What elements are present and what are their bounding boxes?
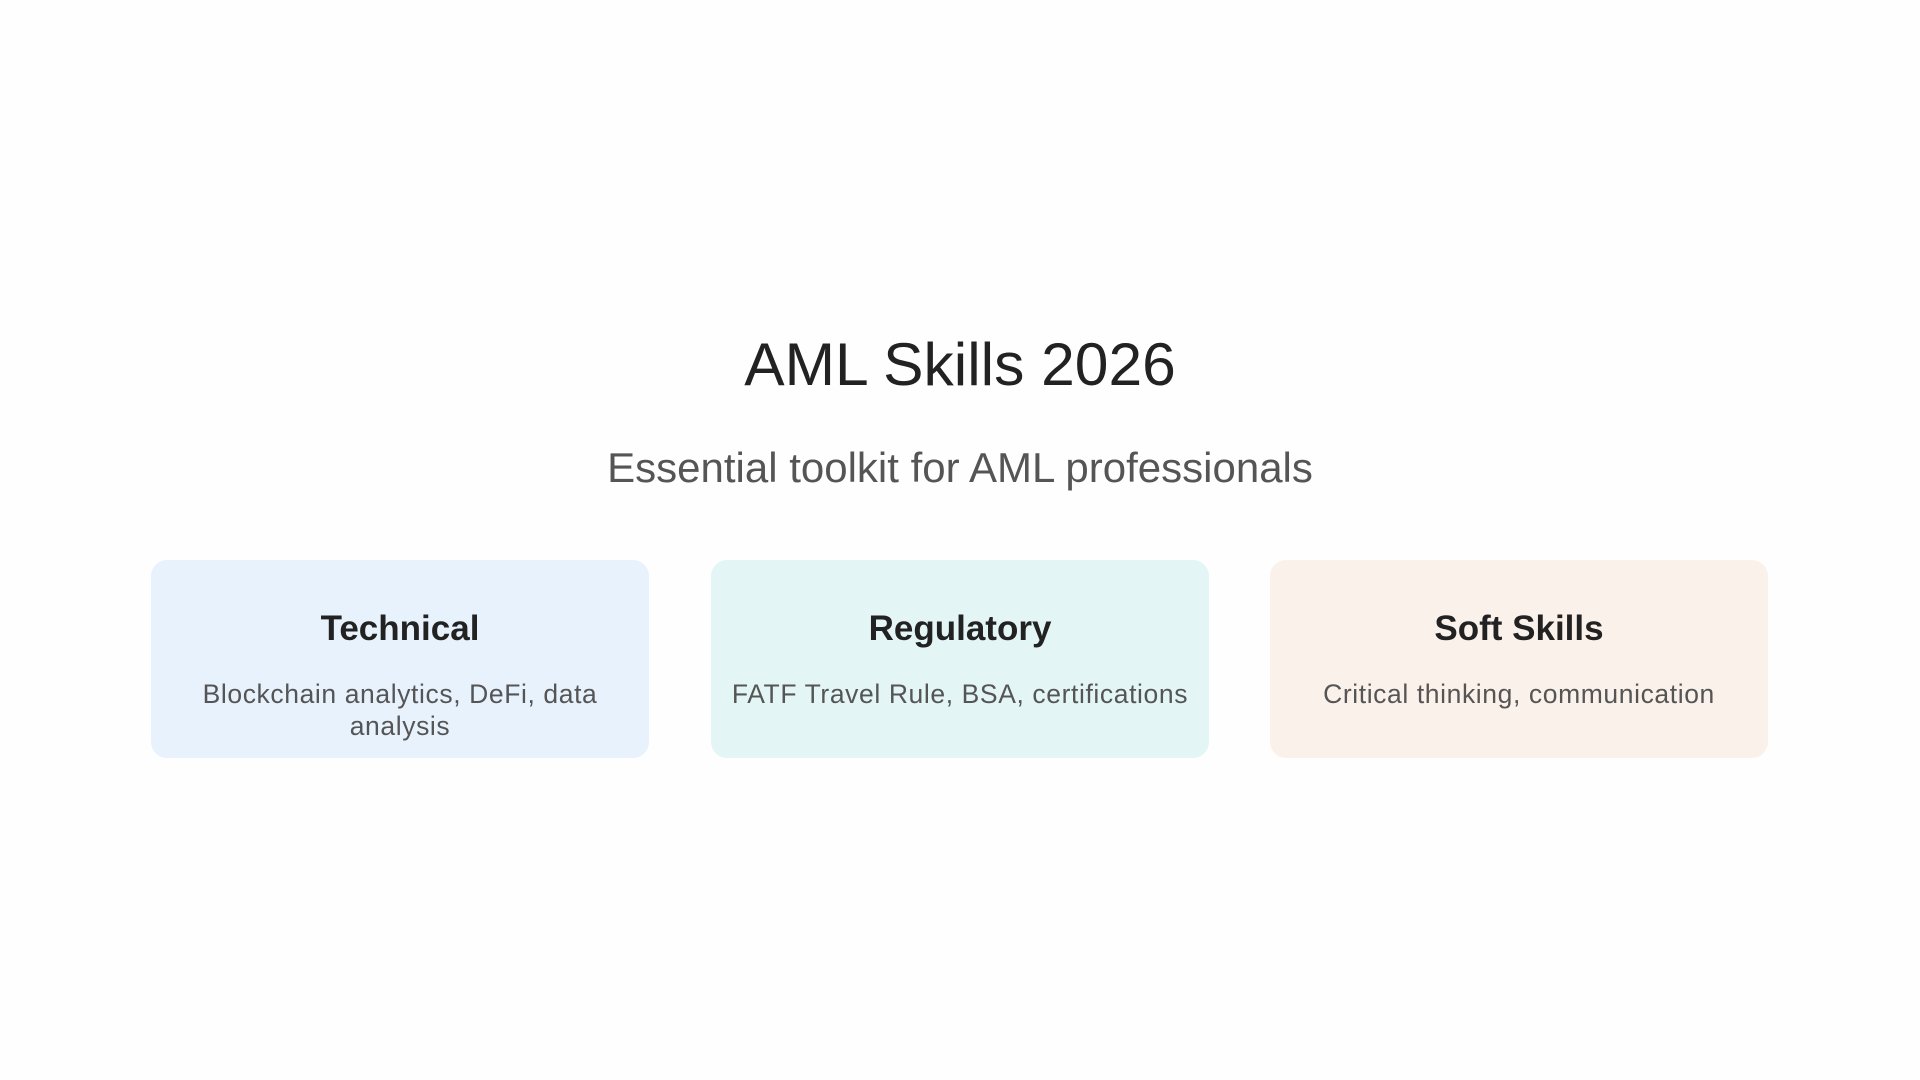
text: regulatory: FATF Travel Rule, BSA, certifications — [732, 679, 1188, 709]
panel: regulatory — [711, 560, 1209, 758]
heading: technical: Technical — [321, 609, 479, 648]
title: AML Skills 2026 — [744, 330, 1176, 398]
text: soft skills: Critical thinking, communication — [1323, 679, 1715, 709]
panel: soft skills — [1270, 560, 1768, 758]
text: technical: Blockchain analytics, DeFi, data analysis — [203, 679, 597, 741]
heading: soft skills: Soft Skills — [1434, 609, 1604, 648]
heading: regulatory: Regulatory — [869, 609, 1051, 648]
panel: technical — [151, 560, 649, 758]
subtitle: Essential toolkit for AML professionals — [607, 444, 1313, 491]
